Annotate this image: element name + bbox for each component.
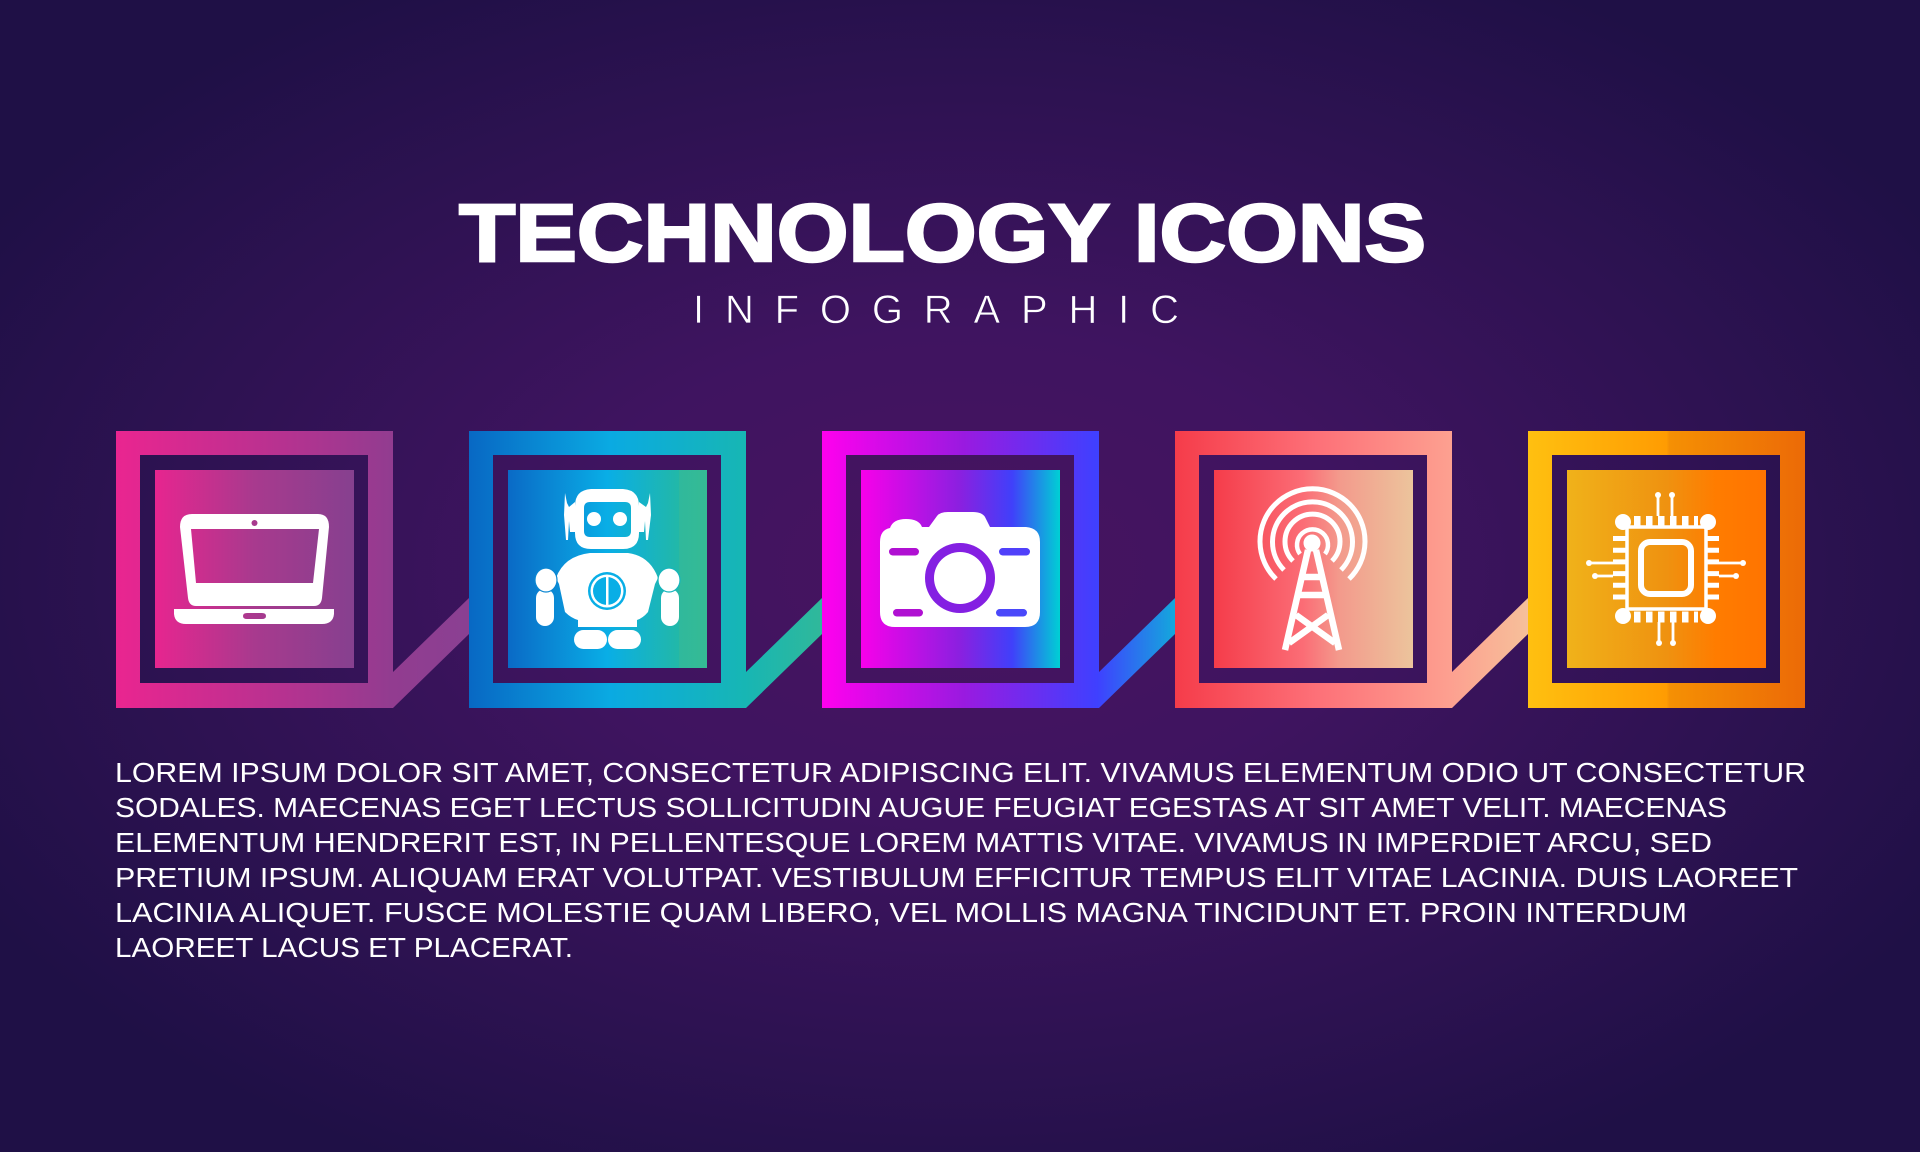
panel: camera: [822, 431, 1175, 708]
body text: LOREM IPSUM DOLOR SIT AMET, CONSECTETUR ADIPISCING ELIT. VIVAMUS ELEMENTUM ODIO UT CONSECTETUR: [115, 757, 1806, 788]
subtitle: INFOGRAPHIC: [693, 288, 1179, 332]
icon: laptop: [174, 514, 334, 624]
icon: chip: [1586, 492, 1746, 646]
body text: SODALES. MAECENAS EGET LECTUS SOLLICITUDIN AUGUE FEUGIAT EGESTAS AT SIT AMET VELIT. MAECENAS: [115, 792, 1727, 823]
icon: robot: [535, 489, 680, 649]
body text: PRETIUM IPSUM. ALIQUAM ERAT VOLUTPAT. VESTIBULUM EFFICITUR TEMPUS ELIT VITAE LACINIA. DUIS LAOREET: [115, 862, 1798, 893]
icon: tower: [1260, 489, 1365, 650]
body text: [115, 757, 1806, 963]
icon: camera: [880, 512, 1040, 627]
panel: tower: [1175, 431, 1528, 708]
body text: ELEMENTUM HENDRERIT EST, IN PELLENTESQUE LOREM MATTIS VITAE. VIVAMUS IN IMPERDIET ARCU, SED: [115, 827, 1712, 858]
panel: chip: [1528, 431, 1805, 708]
body text: LAOREET LACUS ET PLACERAT.: [115, 932, 573, 963]
body text: LACINIA ALIQUET. FUSCE MOLESTIE QUAM LIBERO, VEL MOLLIS MAGNA TINCIDUNT ET. PROIN INTERDUM: [115, 897, 1687, 928]
panel: robot: [469, 431, 822, 708]
panel: laptop: [116, 431, 469, 708]
title: TECHNOLOGY ICONS: [459, 188, 1426, 279]
